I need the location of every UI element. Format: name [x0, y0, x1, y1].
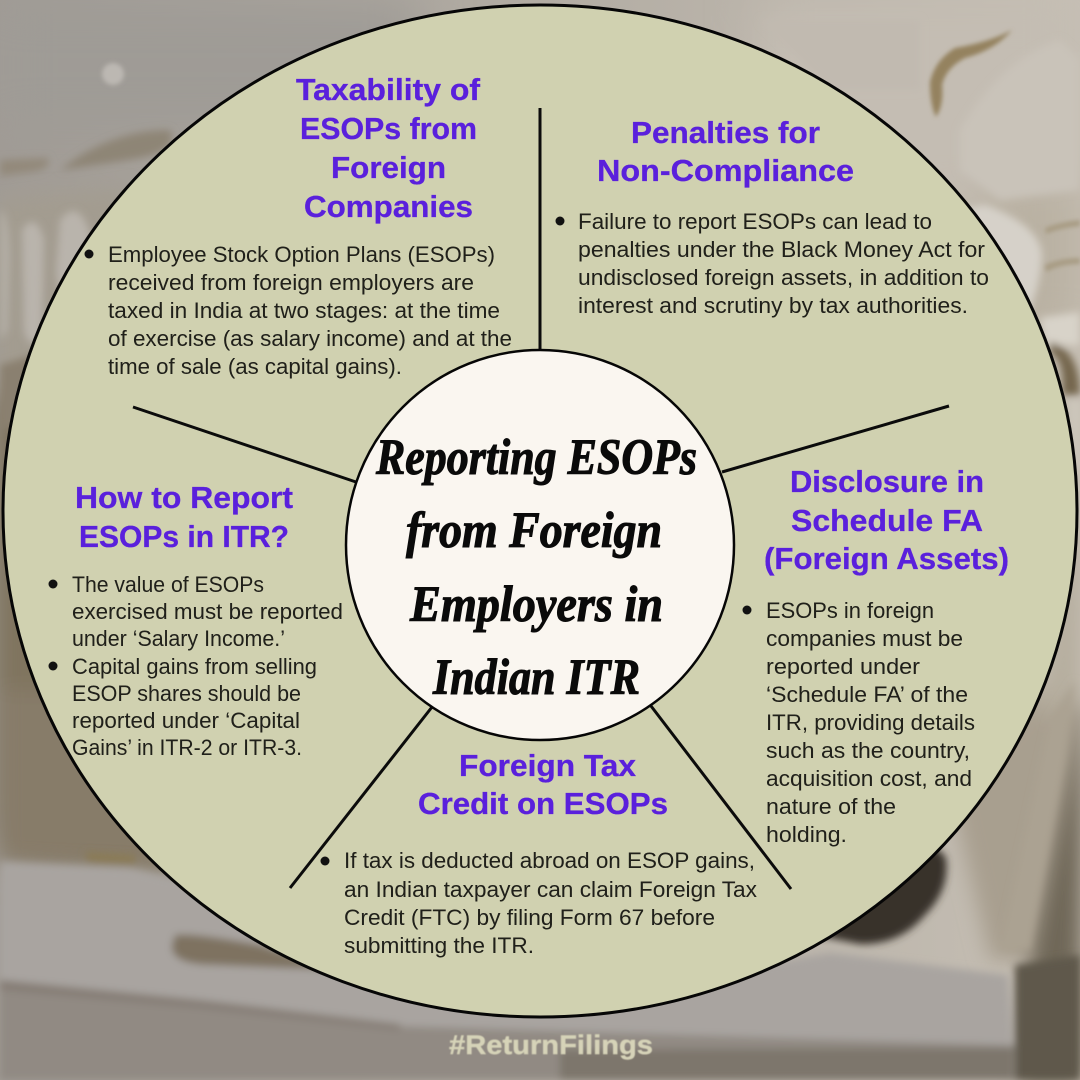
bullet text: penalties: penalties under the Black Money Act for [578, 237, 985, 262]
bullet text: how to report: exercised must be reported [72, 599, 343, 624]
cream right folds [960, 40, 1080, 200]
title: Employers in [409, 577, 663, 633]
bullet text: disclosure: reported under [766, 654, 920, 679]
heading: how to report [75, 480, 293, 554]
panel: taxability of ESOPs [84, 72, 512, 379]
panel: centre circle with title [346, 350, 734, 740]
heading: disclosure: Disclosure in [790, 464, 984, 499]
bullet text: penalties: interest and scrutiny by tax authorities. [578, 293, 968, 318]
heading: foreign tax credit: Foreign Tax [459, 748, 637, 783]
hashtag footer: #ReturnFilings [449, 1030, 653, 1060]
bullet text: foreign tax credit: an Indian taxpayer can claim Foreign Tax [344, 877, 757, 902]
dark round object [790, 843, 947, 944]
heading: foreign tax credit: Credit on ESOPs [418, 786, 668, 821]
bullet text: foreign tax credit: submitting the ITR. [344, 933, 534, 958]
bullet text: how to report: under ‘Salary Income.’ [72, 626, 285, 651]
heading: how to report: How to Report [75, 480, 293, 515]
heading: taxability: Foreign [331, 150, 446, 185]
bullet text: taxability: Employee Stock Option Plans (ESOPs) [108, 242, 495, 267]
bullet text: disclosure: holding. [766, 822, 847, 847]
bullet text: disclosure: companies must be [766, 626, 963, 651]
bullet text: how to report: Gains’ in ITR-2 or ITR-3. [72, 735, 302, 760]
tray side column [1000, 680, 1075, 950]
bullet text: disclosure: ‘Schedule FA’ of the [766, 682, 968, 707]
heading: disclosure: Schedule FA [791, 503, 983, 538]
bullet text: disclosure: ESOPs in foreign [766, 598, 934, 623]
panel: foreign tax credit [320, 748, 757, 958]
heading: disclosure [764, 464, 1009, 576]
heading: taxability [296, 72, 481, 224]
bullet text: how to report: reported under ‘Capital [72, 708, 300, 733]
heading: penalties: Penalties for [631, 115, 820, 150]
heading: penalties [597, 115, 854, 188]
panel: penalties [556, 115, 989, 318]
bullet text: penalties: Failure to report ESOPs can lead to [578, 209, 932, 234]
title [375, 430, 697, 706]
title: Reporting ESOPs [375, 430, 697, 486]
title: from Foreign [406, 503, 662, 559]
bullet text: how to report [48, 572, 343, 760]
left folds [60, 130, 172, 170]
heading: penalties: Non-Compliance [597, 153, 854, 188]
pale tray band [0, 862, 1013, 1045]
heading: disclosure: (Foreign Assets) [764, 541, 1009, 576]
bullet text: foreign tax credit [320, 848, 757, 958]
bullet text: taxability: time of sale (as capital gains). [108, 354, 402, 379]
heading: foreign tax credit [418, 748, 668, 821]
bullet text: taxability [84, 242, 512, 379]
bullet text: penalties: undisclosed foreign assets, in addition to [578, 265, 989, 290]
bullet text: taxability: of exercise (as salary income) and at the [108, 326, 512, 351]
bullet text: taxability: received from foreign employers are [108, 270, 474, 295]
bullet text: disclosure: ITR, providing details [766, 710, 975, 735]
brown fold streak [930, 30, 1012, 117]
bullet text: how to report: The value of ESOPs [72, 572, 264, 597]
heading: taxability: ESOPs from [300, 111, 477, 146]
panel: how to report [48, 480, 343, 760]
bullet text: taxability: taxed in India at two stages: at the time [108, 298, 500, 323]
bullet text: foreign tax credit: Credit (FTC) by filing Form 67 before [344, 905, 715, 930]
divider spokes [133, 108, 949, 889]
panel: disclosure in schedule FA [742, 464, 1009, 847]
heading: taxability: Companies [304, 189, 473, 224]
bullet text: disclosure: acquisition cost, and [766, 766, 972, 791]
bullet text: disclosure: nature of the [766, 794, 896, 819]
heading: how to report: ESOPs in ITR? [79, 519, 289, 554]
bullet text: disclosure: such as the country, [766, 738, 970, 763]
bullet text: penalties [556, 209, 989, 318]
bullet text: how to report: Capital gains from selling [72, 654, 317, 679]
heading: taxability: Taxability of [296, 72, 481, 107]
bullet text: disclosure [742, 598, 975, 847]
bullet text: how to report: ESOP shares should be [72, 681, 301, 706]
title: Indian ITR [432, 650, 640, 706]
bullet text: foreign tax credit: If tax is deducted abroad on ESOP gains, [344, 848, 755, 873]
